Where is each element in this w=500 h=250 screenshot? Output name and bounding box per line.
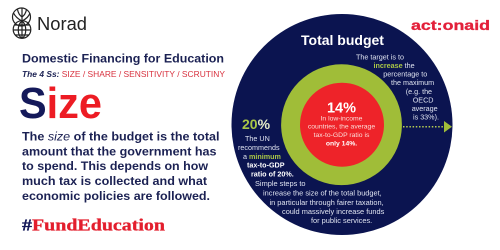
text: target: The target is to — [356, 52, 404, 62]
circle: 20% target ring — [281, 64, 402, 185]
arrow: increase — [403, 121, 452, 132]
title: Size: Size — [19, 79, 102, 128]
body text: to spend. This depends on how — [22, 159, 208, 173]
text: 20%: ratio of 20%. — [251, 170, 294, 179]
text: 14%: only 14%. — [326, 140, 357, 148]
text: 20%: recommends — [238, 143, 280, 152]
text: 14% — [308, 100, 375, 148]
body text: much tax is collected and what — [22, 174, 207, 188]
text: target: the maximum — [391, 78, 434, 87]
text: target: percentage to — [383, 70, 427, 79]
body text: The size of the budget is the total — [22, 130, 220, 144]
circle: 14% current — [300, 83, 384, 167]
subheading: the 4 Ss: The 4 Ss: SIZE / SHARE / SENSITIVITY / SCRUTINY — [22, 69, 225, 79]
text: 20% — [238, 116, 294, 179]
text: 14%: tax-to-GDP ratio is — [314, 132, 370, 139]
text: target: average — [412, 104, 438, 113]
body text: amount that the government has — [22, 144, 217, 158]
text: simple steps: Simple steps to — [255, 179, 306, 188]
body text — [22, 130, 220, 203]
body text: economic policies are followed. — [22, 189, 210, 203]
text: simple steps: could massively increase funds — [282, 207, 385, 216]
logo: actionaid: act:onaid — [411, 18, 490, 33]
text: target — [356, 52, 439, 121]
icon: Norad globe and tree — [12, 8, 31, 38]
text: 20%: 20% — [242, 116, 271, 132]
text: 14%: countries, the average — [308, 124, 375, 131]
text: 14%: In low-income — [321, 116, 363, 122]
hashtag: FundEducation: #FundEducation — [22, 216, 165, 234]
text: 14%: 14% — [327, 100, 356, 116]
chart: nested circles — [232, 14, 452, 235]
text: 20%: The UN — [245, 134, 270, 143]
logo: Norad — [12, 8, 87, 38]
text: 20%: a minimum — [243, 152, 281, 161]
heading: Domestic Financing for Education — [22, 52, 224, 66]
text: simple steps: in particular through fairer taxation, — [270, 198, 384, 207]
label: total budget: Total budget — [301, 32, 384, 48]
wordmark: Norad: Norad — [37, 13, 87, 34]
text: simple steps — [255, 179, 385, 225]
text: simple steps: for public services. — [311, 216, 372, 225]
text: 20%: tax-to-GDP — [247, 160, 285, 170]
text: simple steps: increase the size of the total budget, — [263, 189, 382, 198]
text: target: increase the — [374, 61, 415, 70]
text: target: (e.g. the — [406, 87, 432, 96]
text: target: OECD — [413, 95, 433, 104]
text: target: is 33%). — [413, 112, 439, 121]
circle: total budget — [232, 14, 452, 235]
